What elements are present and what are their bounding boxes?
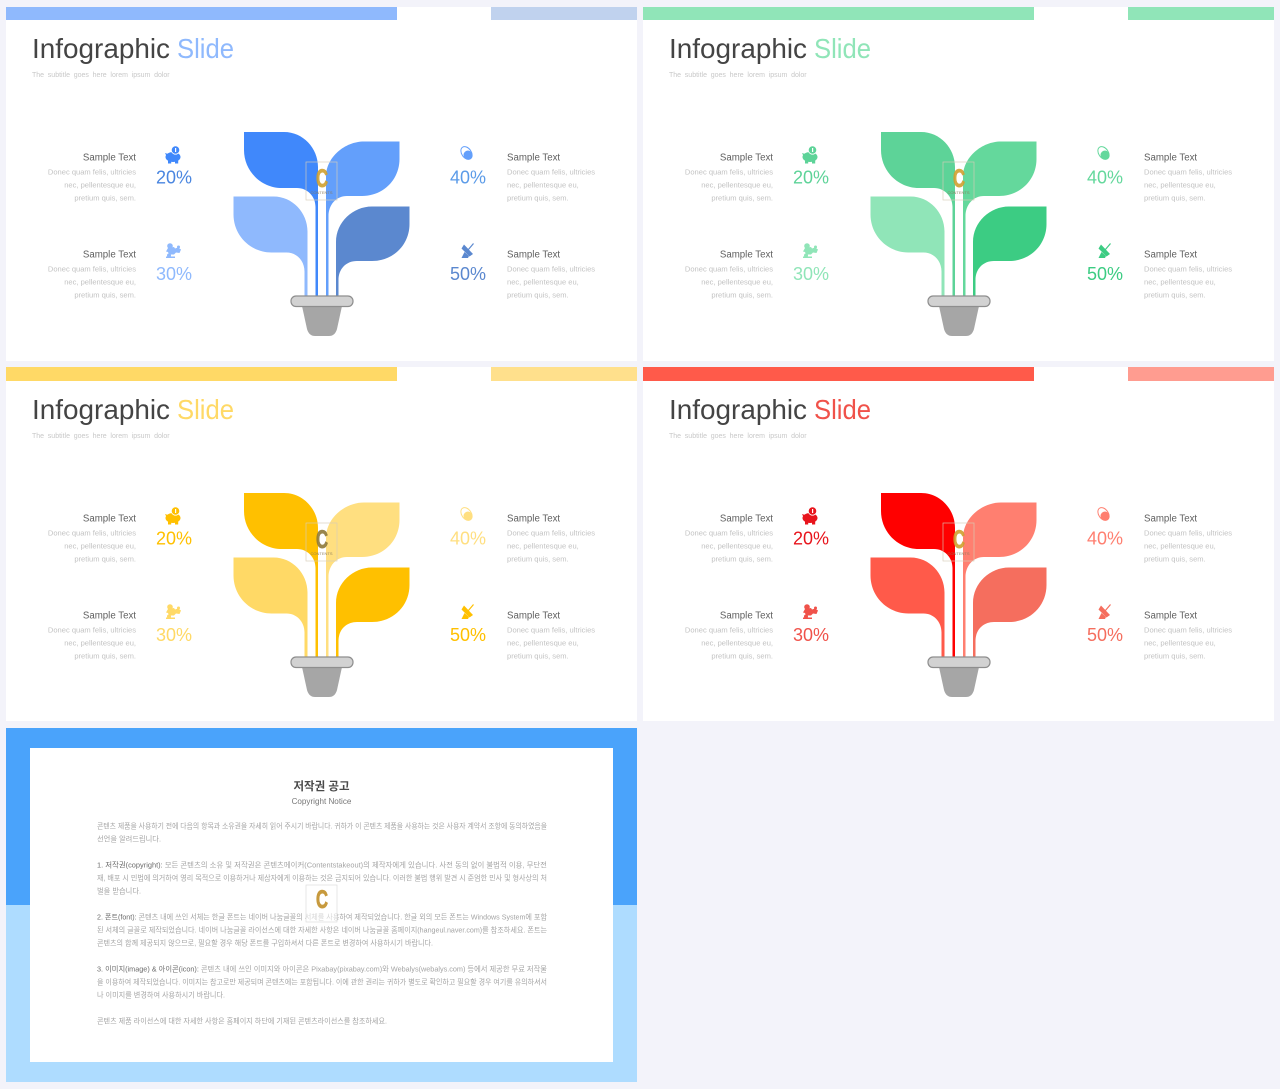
item: 20%: Sample Text [83, 152, 136, 164]
subtitle: The subtitle goes here lorem ipsum dolor [669, 72, 807, 79]
item: 40%: Donec quam felis, ultricies [507, 168, 595, 176]
watermark [306, 885, 337, 922]
item: 20%: nec, pellentesque eu, [701, 542, 773, 550]
item: 20%: 20% [793, 168, 829, 188]
heading [669, 394, 871, 425]
watermark: C [953, 526, 965, 554]
heading: Infographic [669, 33, 807, 64]
notice subheading: Copyright Notice [292, 797, 352, 806]
item: 50%: 50% [1087, 264, 1123, 284]
item: 40%: nec, pellentesque eu, [1144, 180, 1216, 190]
notice section 1: 벌을 받습니다. [97, 886, 141, 896]
item: 50%: nec, pellentesque eu, [507, 638, 579, 648]
item: 20%: Sample Text [720, 152, 773, 164]
notice section 1: 1. 저작권(copyright): 모든 콘텐츠의 소유 및 저작권은 콘텐츠메이커(Contentstakeout)의 제작자에게 있습니다. 사전 동의 없이 불법적 이용, 무단전 [97, 860, 547, 870]
item: 40%: nec, pellentesque eu, [1144, 542, 1216, 550]
item: 40%: Sample Text [1144, 152, 1197, 164]
item: 20% [48, 146, 192, 202]
item: 30%: nec, pellentesque eu, [701, 638, 773, 648]
item: 50%: pretium quis, sem. [1144, 652, 1206, 660]
watermark: CONTENTS [948, 551, 970, 556]
notice intro: 선언을 알려드립니다. [97, 834, 161, 844]
plant chart [234, 493, 410, 697]
panel: yellow infographic slide [6, 367, 637, 721]
item: 20%: 20% [793, 528, 829, 548]
item: 20%: pretium quis, sem. [711, 194, 773, 202]
heading: Infographic [669, 394, 807, 425]
heading: Slide [177, 394, 234, 425]
item: 40% [450, 506, 595, 564]
item: 30%: Sample Text [83, 610, 136, 622]
item: 50%: Sample Text [507, 250, 560, 260]
item: 20%: nec, pellentesque eu, [64, 180, 136, 190]
item: 40%: 40% [1087, 528, 1123, 548]
item: 30%: Sample Text [720, 250, 773, 260]
item: 50% [1087, 244, 1232, 300]
subtitle: The subtitle goes here lorem ipsum dolor [32, 72, 170, 79]
item: 40% [1087, 145, 1232, 202]
plant chart [234, 132, 410, 336]
subtitle: The subtitle goes here lorem ipsum dolor [669, 433, 807, 440]
item: 40%: Sample Text [1144, 514, 1197, 524]
watermark [306, 523, 337, 561]
notice section 2: 된 서체의 글꼴로 제작되었습니다. 네이버 나눔글꼴 라이선스에 대한 자세한 사항은 네이버 나눔글꼴 홈페이지(hangeul.naver.com)를 참조하세요. 폰트는 [97, 924, 547, 934]
watermark: CONTENTS [948, 190, 970, 195]
notice section 1 [97, 860, 547, 896]
notice footer: 콘텐츠 제품 라이선스에 대한 자세한 사항은 홈페이지 하단에 기재된 콘텐츠라이선스를 참조하세요. [97, 1016, 387, 1026]
notice intro: 콘텐츠 제품을 사용하기 전에 다음의 항목과 소유권을 자세히 읽어 주시기 바랍니다. 귀하가 이 콘텐츠 제품을 사용하는 것은 사용자 계약서 조항에 동의하였음을 [97, 820, 547, 830]
panel: green infographic slide [643, 7, 1274, 361]
item: 20%: Sample Text [83, 514, 136, 524]
item: 20%: pretium quis, sem. [74, 554, 136, 564]
item: 50%: Sample Text [507, 610, 560, 622]
item: 30%: 30% [156, 625, 192, 645]
notice section 3: 나 이미지를 변경하여 사용하시기 바랍니다. [97, 990, 225, 1000]
item: 20%: Donec quam felis, ultricies [685, 168, 773, 176]
item: 50% [450, 244, 595, 300]
item: 20%: pretium quis, sem. [74, 194, 136, 202]
item: 50%: nec, pellentesque eu, [1144, 278, 1216, 286]
heading: Infographic [32, 33, 170, 64]
item: 30%: Sample Text [83, 250, 136, 260]
item: 30%: Donec quam felis, ultricies [48, 626, 136, 634]
notice intro [97, 820, 547, 844]
item: 50%: 50% [450, 264, 486, 284]
notice section 2 [97, 912, 547, 948]
item: 20%: Donec quam felis, ultricies [685, 528, 773, 538]
item: 40%: pretium quis, sem. [507, 554, 569, 564]
item: 50% [450, 604, 595, 660]
item: 40%: Donec quam felis, ultricies [507, 528, 595, 538]
heading: Slide [177, 33, 234, 64]
item: 20%: nec, pellentesque eu, [64, 542, 136, 550]
item: 40%: 40% [450, 168, 486, 188]
item: 30%: Donec quam felis, ultricies [685, 264, 773, 274]
item: 40%: pretium quis, sem. [507, 194, 569, 202]
watermark: CONTENTS [310, 551, 333, 556]
item: 50%: nec, pellentesque eu, [507, 278, 579, 286]
item: 30%: nec, pellentesque eu, [64, 638, 136, 648]
item: 40%: Donec quam felis, ultricies [1144, 168, 1232, 176]
panel: copyright notice [6, 728, 637, 1082]
item: 50%: Donec quam felis, ultricies [507, 264, 595, 274]
notice section 3 [97, 964, 547, 1000]
item: 30%: 30% [793, 264, 829, 284]
heading: Slide [814, 33, 871, 64]
top bars [643, 367, 1274, 381]
notice section 2: 콘텐츠의 함께 제공되지 않으므로, 필요할 경우 해당 폰트를 구입하셔서 다른 폰트로 변경하여 사용하시기 바랍니다. [97, 938, 433, 948]
heading: Infographic [32, 394, 170, 425]
plant chart [870, 132, 1046, 336]
notice section 2: 2. 폰트(font): 콘텐츠 내에 쓰인 서체는 한글 폰트는 네이버 나눔글꼴의 서체를 사용하여 제작되었습니다. 한글 외의 모든 폰트는 Windows System에 포함 [97, 912, 547, 922]
item: 30%: 30% [156, 264, 192, 284]
item: 30%: pretium quis, sem. [711, 652, 773, 660]
item: 20%: 20% [156, 528, 192, 548]
item: 30%: Donec quam felis, ultricies [685, 626, 773, 634]
top bars [6, 367, 637, 381]
watermark: CONTENTS [310, 190, 333, 195]
notice heading: 저작권 공고 [293, 779, 350, 793]
item: 50%: nec, pellentesque eu, [1144, 638, 1216, 648]
item: 30% [685, 243, 829, 300]
item: 50%: Sample Text [1144, 610, 1197, 622]
item: 40%: 40% [450, 528, 486, 548]
top bars [643, 7, 1274, 20]
heading: Slide [814, 394, 871, 425]
item: 40%: 40% [1087, 168, 1123, 188]
item: 30% [48, 604, 192, 660]
item: 30%: Donec quam felis, ultricies [48, 264, 136, 274]
panel: red infographic slide [643, 367, 1274, 721]
watermark: C [316, 165, 328, 193]
item: 30%: nec, pellentesque eu, [701, 278, 773, 286]
item: 20%: 20% [156, 168, 192, 188]
item: 20% [685, 507, 829, 564]
item: 40%: Sample Text [507, 514, 560, 524]
notice section 1: 재, 배포 시 민법에 의거하여 영리 목적으로 이용하거나 제삼자에게 이용하는 것은 금지되어 있습니다. 이러한 불법 행위 발견 시 준엄한 민사 및 형사상의 처 [97, 872, 547, 882]
item: 50%: Donec quam felis, ultricies [1144, 626, 1232, 634]
item: 40% [450, 145, 595, 202]
watermark: C [953, 165, 965, 193]
item: 50%: pretium quis, sem. [507, 652, 569, 660]
item: 30%: pretium quis, sem. [74, 652, 136, 660]
item: 50%: Sample Text [1144, 250, 1197, 260]
item: 30%: pretium quis, sem. [711, 290, 773, 300]
watermark [943, 523, 974, 561]
notice section 3: 을 이용하여 제작되었습니다. 이미지는 참고로만 제공되며 콘텐츠에는 포함됩니다. 이에 관한 권리는 귀하가 별도로 확인하고 필요할 경우 여기를 유의하셔서 [97, 976, 547, 986]
item: 40%: nec, pellentesque eu, [507, 542, 579, 550]
subtitle: The subtitle goes here lorem ipsum dolor [32, 433, 170, 440]
item: 20%: Sample Text [720, 514, 773, 524]
item: 50%: pretium quis, sem. [1144, 290, 1206, 300]
item: 20%: pretium quis, sem. [711, 554, 773, 564]
heading [32, 33, 234, 64]
watermark [943, 162, 974, 200]
item: 20%: Donec quam felis, ultricies [48, 168, 136, 176]
watermark: C [316, 526, 328, 554]
item: 50%: 50% [1087, 625, 1123, 645]
watermark [306, 162, 337, 200]
item: 20%: nec, pellentesque eu, [701, 180, 773, 190]
item: 50% [1087, 604, 1232, 660]
item: 50%: 50% [450, 625, 486, 645]
item: 50%: Donec quam felis, ultricies [1144, 264, 1232, 274]
item: 40% [1087, 506, 1232, 564]
item: 50%: Donec quam felis, ultricies [507, 626, 595, 634]
item: 30%: pretium quis, sem. [74, 290, 136, 300]
item: 40%: pretium quis, sem. [1144, 554, 1206, 564]
watermark: C [316, 886, 328, 914]
item: 30%: Sample Text [720, 610, 773, 622]
item: 20%: Donec quam felis, ultricies [48, 528, 136, 538]
item: 30%: 30% [793, 625, 829, 645]
panel: blue infographic slide [6, 7, 637, 361]
item: 40%: Sample Text [507, 152, 560, 164]
item: 30% [48, 243, 192, 300]
item: 40%: Donec quam felis, ultricies [1144, 528, 1232, 538]
item: 50%: pretium quis, sem. [507, 290, 569, 300]
heading [669, 33, 871, 64]
item: 40%: nec, pellentesque eu, [507, 180, 579, 190]
top bars [6, 7, 637, 20]
notice section 3: 3. 이미지(image) & 아이콘(icon): 콘텐츠 내에 쓰인 이미지와 아이콘은 Pixabay(pixabay.com)와 Webalys(webalys.com) 등에서 제공한 무료 저작물 [97, 964, 547, 974]
item: 20% [48, 507, 192, 564]
heading [32, 394, 234, 425]
item: 30%: nec, pellentesque eu, [64, 278, 136, 286]
plant chart [870, 493, 1046, 697]
item: 30% [685, 604, 829, 660]
item: 40%: pretium quis, sem. [1144, 194, 1206, 202]
item: 20% [685, 146, 829, 202]
